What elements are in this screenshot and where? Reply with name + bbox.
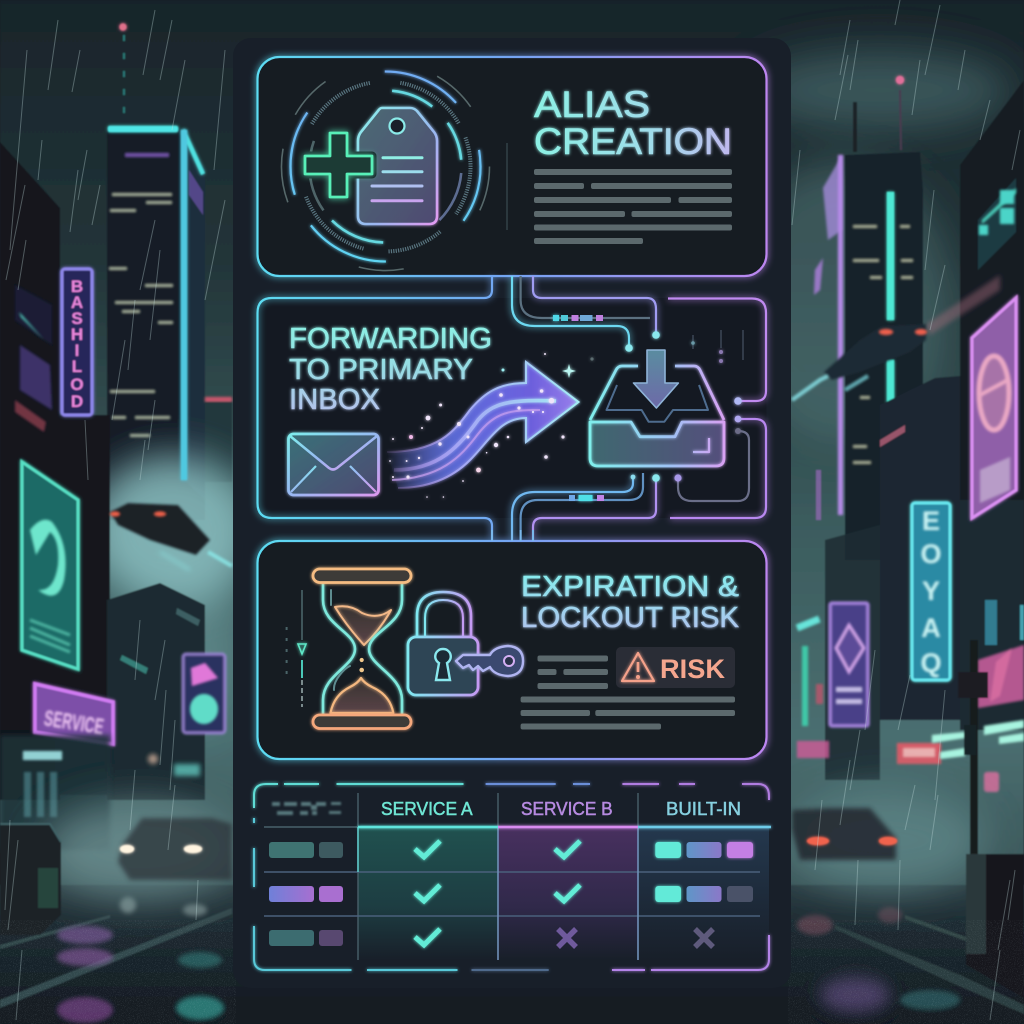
icon: tag — [358, 108, 437, 224]
connector end dots — [590, 331, 742, 482]
sparkle particles — [389, 353, 576, 498]
risk label: RISK — [660, 654, 725, 684]
pink neon shop sign: SERVICE — [42, 705, 106, 740]
vertical neon sign: H — [71, 325, 83, 344]
column headers: SERVICE B — [521, 799, 613, 819]
small street sign — [183, 654, 225, 733]
circuit frame and connectors — [258, 276, 766, 541]
grid lines — [264, 793, 760, 960]
right buildings — [814, 76, 1024, 780]
left ground car — [118, 818, 232, 880]
green neon billboard — [22, 462, 78, 669]
right street neon — [796, 616, 1024, 792]
left buildings — [0, 24, 232, 800]
traffic light — [958, 640, 988, 855]
table header rule — [358, 826, 771, 828]
wet road — [0, 885, 1024, 1024]
panel 1 neon frame — [258, 57, 766, 276]
icon: inbox down arrow — [634, 350, 678, 408]
text placeholder lines — [534, 169, 732, 244]
left fog over tower — [87, 455, 257, 605]
arrow: curved forwarding stream — [387, 353, 578, 498]
column headers: BUILT-IN — [666, 799, 741, 819]
vertical neon sign: O — [70, 375, 84, 394]
cyan vertical sign — [912, 503, 950, 680]
icon: plus — [305, 133, 372, 197]
right streak of car light — [925, 275, 1000, 335]
vertical neon sign: A — [71, 293, 83, 312]
cross marks — [558, 929, 713, 947]
comparison table — [254, 784, 771, 970]
built-in feature chips — [655, 842, 753, 902]
pink neon shop sign — [35, 684, 113, 744]
faint connectors — [521, 276, 749, 541]
left shopfront — [0, 735, 200, 850]
icon: padlock — [408, 592, 478, 695]
main dark card — [233, 38, 791, 988]
connector stubs — [492, 530, 533, 541]
dashed neon frame — [254, 784, 769, 970]
table cell tints — [358, 827, 769, 960]
right flying car — [792, 324, 927, 400]
panel: expiration and lockout risk — [258, 530, 766, 759]
road speckle — [0, 920, 1024, 1024]
right street box — [966, 854, 1024, 998]
cyan vertical sign: Q — [920, 648, 942, 678]
cyan vertical sign: E — [922, 506, 940, 536]
vertical neon sign: S — [71, 309, 83, 328]
text placeholder lines — [521, 656, 735, 730]
panel 3 neon frame — [258, 541, 766, 759]
left street-side building — [55, 415, 110, 795]
icon: envelope — [288, 434, 378, 495]
heading: alias creation: ALIAS — [534, 84, 650, 125]
connector data chips — [553, 315, 604, 501]
header placeholder glyphs — [272, 802, 341, 815]
cyan vertical sign: A — [921, 613, 941, 643]
pink round billboard — [972, 298, 1016, 518]
icon: key — [456, 646, 523, 676]
icon: inbox tray — [590, 350, 724, 466]
vertical neon sign: I — [75, 341, 79, 360]
panel: alias creation — [243, 24, 767, 309]
cyan vertical sign: Y — [922, 576, 940, 606]
street fog — [40, 790, 985, 898]
row label blocks — [269, 842, 343, 946]
heading: alias creation: CREATION — [534, 121, 732, 162]
tower neon edge — [181, 130, 187, 480]
vertical neon sign: L — [72, 357, 82, 376]
divider — [506, 143, 508, 230]
icon: target rings — [243, 24, 528, 309]
cyan vertical sign: O — [920, 539, 942, 569]
left lower building — [107, 583, 205, 800]
timeline marker — [287, 590, 306, 707]
panel 2 interior fill — [258, 298, 766, 518]
icon: hourglass — [313, 569, 411, 728]
icon: warning triangle — [622, 653, 654, 681]
vertical neon sign — [62, 269, 92, 415]
heading: forwarding to primary inbox: FORWARDING — [289, 323, 492, 355]
risk badge — [616, 647, 735, 688]
column headers: SERVICE A — [381, 799, 473, 819]
heading: forwarding to primary inbox: TO PRIMARY — [289, 354, 473, 386]
column headers — [381, 799, 741, 819]
left flying car — [110, 503, 232, 570]
heading: expiration and lockout risk: EXPIRATION & — [521, 571, 739, 603]
vertical neon sign: D — [71, 392, 83, 411]
panel: forwarding to primary inbox — [258, 276, 766, 541]
heading: expiration and lockout risk: LOCKOUT RISK — [521, 602, 740, 634]
heading: forwarding to primary inbox: INBOX — [289, 384, 380, 416]
left bin — [0, 824, 61, 935]
purple diamond sign — [830, 603, 868, 726]
right ground car — [792, 808, 897, 860]
checkmarks — [415, 841, 580, 945]
vertical neon sign: B — [71, 277, 83, 296]
